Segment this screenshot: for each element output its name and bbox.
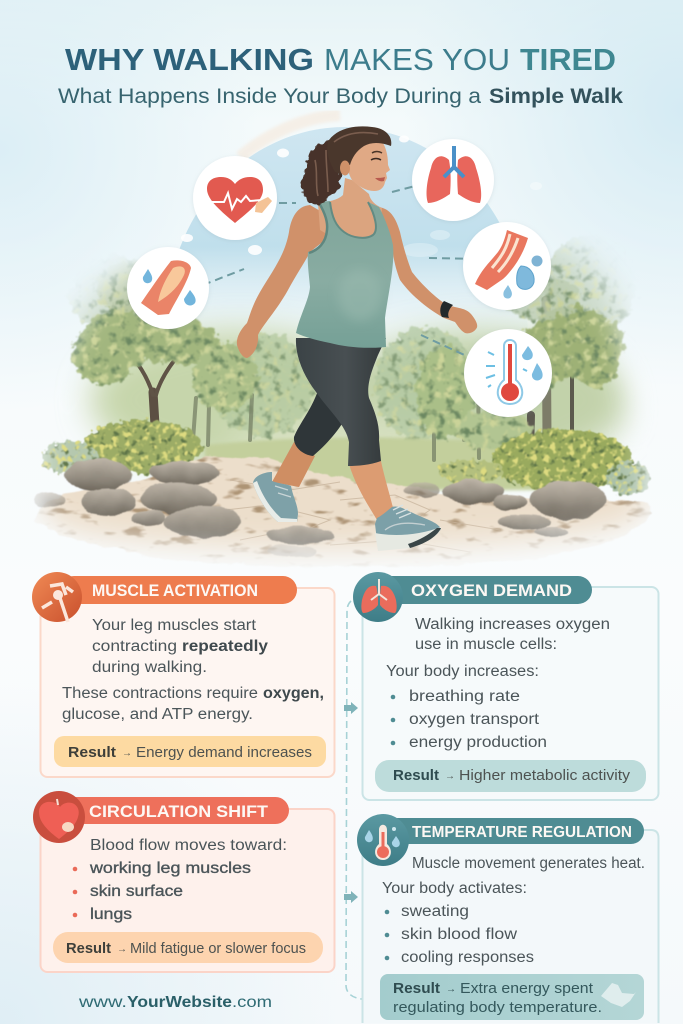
title: MAKES YOU	[324, 42, 510, 77]
hair strands	[315, 133, 378, 196]
icon bubble: arm muscle	[463, 222, 551, 310]
body text and list: working leg muscles	[89, 860, 251, 877]
body text: Your leg muscles start	[92, 617, 257, 634]
result pill: Energy demand increases	[136, 745, 312, 761]
result pill	[380, 974, 644, 1020]
body text and list: Your body increases:	[386, 663, 539, 680]
ground path	[35, 455, 650, 567]
rocks	[34, 458, 606, 557]
header pill: MUSCLE ACTIVATION	[92, 582, 258, 600]
result pill: →	[117, 944, 127, 955]
footer website: .com	[232, 994, 272, 1011]
result pill: →	[122, 748, 132, 759]
front calf	[349, 461, 393, 520]
icon bubble: leg muscle	[127, 247, 209, 329]
icon: heart	[33, 791, 85, 843]
far trunks	[192, 393, 481, 462]
result pill: Mild fatigue or slower focus	[130, 941, 306, 957]
ponytail	[301, 142, 342, 203]
body text: oxygen,	[263, 685, 324, 702]
footer website	[78, 994, 272, 1011]
result pill	[53, 932, 323, 963]
misty green haze	[90, 330, 630, 470]
header pill: TEMPERATURE REGULATION	[412, 824, 632, 841]
dashed flow line connecting cards	[346, 601, 362, 999]
result pill	[375, 760, 646, 792]
result pill: regulating body temperature.	[393, 1000, 602, 1016]
icon bubble: heart	[193, 156, 277, 240]
panel: circulation shift	[33, 791, 334, 972]
icon: muscle activation	[32, 572, 82, 622]
hair cap	[327, 126, 391, 175]
panel: temperature regulation	[357, 814, 658, 1023]
subtitle: What Happens Inside Your Body During a	[58, 84, 481, 108]
body text and list	[382, 855, 645, 966]
arrow marker 3	[362, 993, 375, 1005]
body text and list: oxygen transport	[409, 711, 540, 728]
panel: muscle activation	[32, 572, 334, 777]
dashed connector lines	[203, 183, 479, 359]
body text and list	[73, 837, 287, 923]
body text and list	[386, 616, 610, 751]
icon: lungs	[353, 572, 403, 622]
watch	[440, 301, 453, 318]
body text and list: Walking increases oxygen	[415, 616, 610, 633]
title: WHY WALKING	[65, 42, 314, 77]
header pill	[60, 797, 289, 824]
result pill: Result	[393, 768, 439, 784]
arrow marker 1	[344, 702, 358, 714]
subtitle: Simple Walk	[489, 84, 623, 108]
arrow marker 2	[344, 891, 358, 903]
face	[347, 141, 390, 191]
body text and list: breathing rate	[409, 688, 520, 705]
panel: oxygen demand	[353, 572, 658, 800]
bushes	[42, 420, 650, 495]
result pill: →	[445, 771, 455, 782]
near arm	[237, 205, 327, 358]
header pill	[378, 576, 592, 604]
result pill: Result	[68, 745, 116, 761]
forest and path scene	[34, 235, 650, 567]
icon bubble: lungs	[412, 139, 494, 221]
body text: repeatedly	[182, 638, 268, 655]
result pill: Higher metabolic activity	[459, 768, 631, 784]
body text: glucose, and ATP energy.	[62, 706, 253, 723]
result pill: Result	[66, 941, 111, 957]
body text and list: sweating	[401, 903, 469, 920]
result pill: →	[446, 984, 456, 995]
body text and list: energy production	[409, 734, 547, 751]
body text: These contractions require	[62, 685, 258, 702]
footer website: www.	[78, 994, 127, 1011]
grass band	[205, 438, 540, 490]
body text and list: skin surface	[90, 883, 183, 900]
body text and list: cooling responses	[401, 949, 534, 966]
header pill: CIRCULATION SHIFT	[89, 803, 268, 821]
distant trees	[70, 235, 636, 443]
tree trunks	[128, 300, 572, 450]
body text and list: Muscle movement generates heat.	[412, 855, 645, 872]
back shoe	[253, 472, 298, 522]
path stone cracks	[225, 480, 500, 552]
body text	[62, 617, 324, 723]
footer website: YourWebsite	[127, 994, 232, 1011]
icon bubble: thermometer	[464, 329, 552, 417]
title: TIRED	[520, 42, 616, 77]
eye and lips	[371, 152, 385, 181]
front shoe	[375, 505, 441, 551]
tank top	[296, 201, 393, 348]
header pill	[383, 818, 644, 844]
far arm	[378, 207, 477, 333]
neck and chest	[318, 178, 382, 245]
tree canopies	[71, 262, 624, 450]
result pill: Extra energy spent	[460, 981, 593, 997]
ear	[340, 160, 350, 176]
leggings	[296, 338, 386, 466]
header pill	[60, 576, 297, 604]
back leg	[272, 385, 350, 487]
body text: during walking.	[92, 659, 207, 676]
walking woman	[237, 126, 477, 551]
title	[65, 42, 616, 77]
result pill: Result	[393, 981, 440, 997]
sky arch behind the walker	[165, 115, 542, 345]
result pill	[54, 736, 326, 767]
icon: thermometer	[357, 814, 409, 866]
body text and list: Blood flow moves toward:	[90, 837, 287, 854]
body text: contracting	[92, 638, 177, 655]
body text and list: lungs	[90, 906, 132, 923]
body text and list: Your body activates:	[382, 880, 527, 897]
body text and list: skin blood flow	[401, 926, 518, 943]
body text and list: use in muscle cells:	[415, 636, 557, 653]
header pill: OXYGEN DEMAND	[411, 582, 572, 600]
